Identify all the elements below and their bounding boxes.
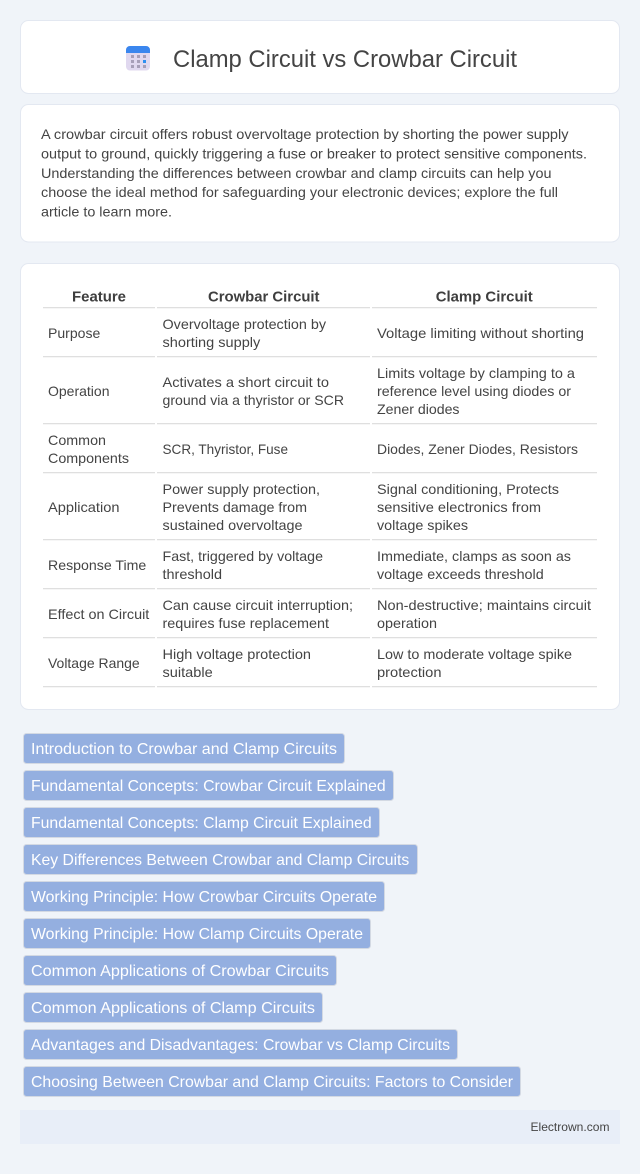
table row: Common Components: Diodes, Zener Diodes, Resistors xyxy=(377,441,578,457)
table row: Operation: Operation xyxy=(48,383,110,399)
link: Introduction: Introduction to Crowbar and Clamp Circuits xyxy=(31,741,337,758)
table row: Effect on Circuit xyxy=(43,597,597,638)
table row: Application: Signal conditioning, Protects xyxy=(377,481,559,497)
link: Clamp working principle: Working Principle: How Clamp Circuits Operate xyxy=(31,926,363,943)
link: Introduction xyxy=(24,734,344,764)
link: Clamp explained xyxy=(24,808,380,838)
link: Key differences xyxy=(24,844,418,874)
table row: Common Components: Common xyxy=(48,432,106,448)
table row: Application xyxy=(43,481,597,540)
table row: Response Time: Response Time xyxy=(48,557,147,573)
table row: Response Time: threshold xyxy=(162,566,222,582)
link: Advantages and disadvantages xyxy=(24,1030,458,1060)
table row: Effect on Circuit: requires fuse replacement xyxy=(162,615,329,631)
title: Clamp Circuit vs Crowbar Circuit xyxy=(173,46,517,73)
link: Crowbar explained xyxy=(24,770,394,800)
link: Crowbar working principle: Working Principle: How Crowbar Circuits Operate xyxy=(31,889,377,906)
table row: Application: Application xyxy=(48,499,120,515)
table row: Voltage Range: High voltage protection xyxy=(162,646,311,662)
table row: Operation: reference level using diodes or xyxy=(377,383,571,399)
link: Crowbar applications xyxy=(24,956,336,986)
table row: Purpose: Overvoltage protection by xyxy=(162,316,326,332)
table row: Operation: ground via a thyristor or SCR xyxy=(162,392,344,408)
text block: introduction paragraph: output to ground, quickly triggering a fuse or breaker to protect sensitive components. xyxy=(41,146,587,162)
link: Choosing between: Choosing Between Crowbar and Clamp Circuits: Factors to Consider xyxy=(31,1074,514,1091)
table row: Voltage Range: Voltage Range xyxy=(48,655,140,671)
link: Key differences: Key Differences Between Crowbar and Clamp Circuits xyxy=(31,852,409,869)
table row: Purpose: shorting supply xyxy=(162,334,260,350)
table row: Effect on Circuit: operation xyxy=(377,615,437,631)
table row: Common Components xyxy=(43,432,597,473)
link: Crowbar applications: Common Applications of Crowbar Circuits xyxy=(31,963,329,980)
panel: comparison table xyxy=(20,264,620,710)
table row: Application: voltage spikes xyxy=(377,517,468,533)
icon: calendar grid xyxy=(126,46,150,70)
table row: Voltage Range: Low to moderate voltage spike xyxy=(377,646,572,662)
table row: Response Time: Fast, triggered by voltage xyxy=(162,548,323,564)
table row: Voltage Range xyxy=(43,646,597,687)
table row: Response Time: voltage exceeds threshold xyxy=(377,566,544,582)
panel: title header xyxy=(20,20,620,94)
text block: introduction paragraph xyxy=(41,126,587,220)
table row: Purpose: Voltage limiting without shorting xyxy=(377,325,584,341)
table row: Application: Power supply protection, xyxy=(162,481,320,497)
table row: Effect on Circuit: Effect on Circuit xyxy=(48,606,149,622)
text block: introduction paragraph: A crowbar circuit offers robust overvoltage protection by shorting the power supply xyxy=(41,126,568,142)
link: Crowbar explained: Fundamental Concepts: Crowbar Circuit Explained xyxy=(31,778,386,795)
table row: Operation: Activates a short circuit to xyxy=(162,374,329,390)
table header row: Crowbar Circuit xyxy=(208,288,320,306)
footer xyxy=(20,1110,620,1144)
table header row: Clamp Circuit xyxy=(436,288,533,306)
table header row xyxy=(43,288,597,308)
text block: introduction paragraph: Understanding the differences between crowbar and clamp circuits can help you xyxy=(41,165,552,181)
table row: Voltage Range: suitable xyxy=(162,664,213,680)
link: Clamp applications: Common Applications of Clamp Circuits xyxy=(31,1000,315,1017)
link: Advantages and disadvantages: Advantages and Disadvantages: Crowbar vs Clamp Circuits xyxy=(31,1037,450,1054)
table row: Operation: Limits voltage by clamping to a xyxy=(377,365,575,381)
link: Clamp working principle xyxy=(24,918,370,948)
navigation links list xyxy=(24,734,520,1096)
table row: Voltage Range: protection xyxy=(377,664,442,680)
link: Clamp applications xyxy=(24,992,322,1022)
table row: Common Components: SCR, Thyristor, Fuse xyxy=(162,441,288,457)
link: Clamp explained: Fundamental Concepts: Clamp Circuit Explained xyxy=(31,815,372,832)
table row: Purpose: Purpose xyxy=(48,325,101,341)
footer source credit: Electrown.com xyxy=(530,1120,610,1134)
table row: Effect on Circuit: Can cause circuit interruption; xyxy=(162,597,353,613)
table header row: Feature xyxy=(72,288,126,306)
table row: Response Time xyxy=(43,548,597,589)
table row: Purpose xyxy=(43,316,597,357)
table row: Operation: Zener diodes xyxy=(377,401,460,417)
table row: Application: sustained overvoltage xyxy=(162,517,303,533)
link: Choosing between xyxy=(24,1066,520,1096)
table row: Application: sensitive electronics from xyxy=(377,499,541,515)
table row: Response Time: Immediate, clamps as soon as xyxy=(377,548,571,564)
link: Crowbar working principle xyxy=(24,882,384,912)
table row: Application: Prevents damage from xyxy=(162,499,307,515)
text block: introduction paragraph: article to learn more. xyxy=(41,204,172,220)
table row: Effect on Circuit: Non-destructive; maintains circuit xyxy=(377,597,591,613)
table row: Operation xyxy=(43,365,597,424)
text block: introduction paragraph: choose the ideal method for safeguarding your electronic devices; explore the full xyxy=(41,184,558,200)
table row: Common Components: Components xyxy=(48,450,129,466)
panel: introduction xyxy=(20,104,620,242)
